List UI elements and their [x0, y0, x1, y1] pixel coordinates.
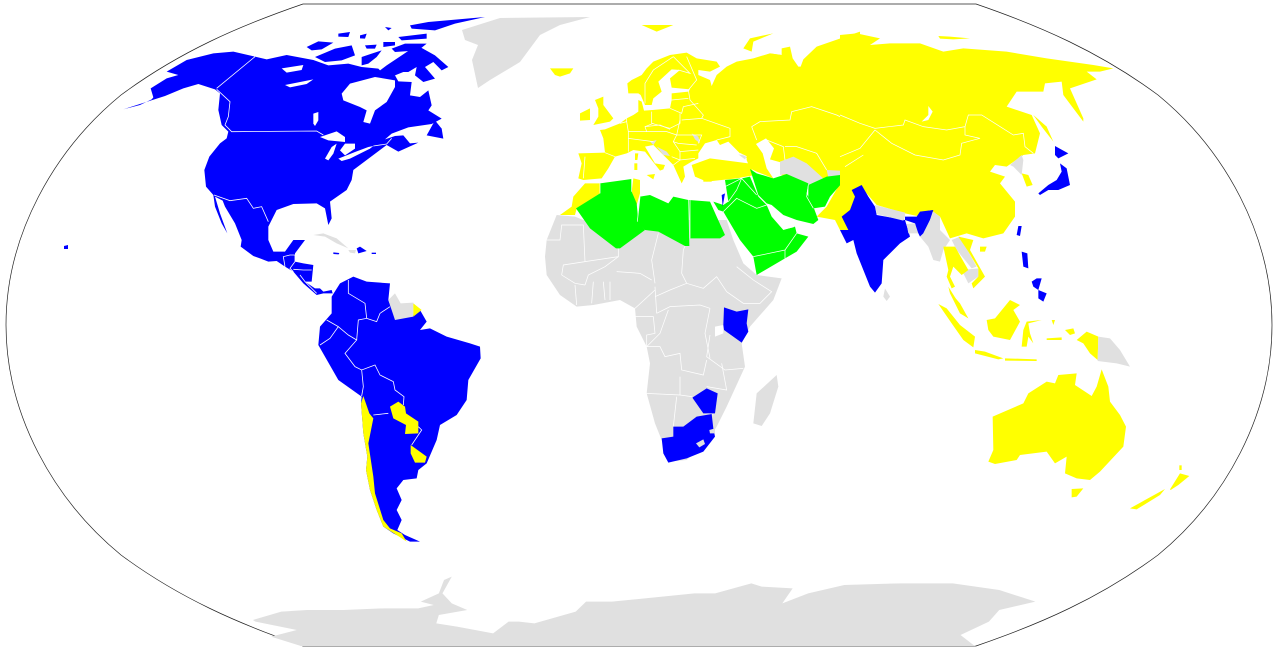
Tajikistan: [827, 170, 842, 179]
landmass: Africa: [545, 215, 782, 462]
Malay Peninsula: [948, 287, 968, 318]
Indonesia and Malaysia: [938, 290, 1075, 361]
Georgia region: [738, 154, 747, 159]
region: Southeast Asia and Oceania: [938, 290, 1189, 509]
Lesotho: [696, 439, 705, 447]
Paraguay: [390, 402, 418, 434]
Svalbard: [642, 25, 673, 32]
landmass: South America: [318, 277, 481, 542]
continent: Antarctica: [253, 577, 1035, 646]
Russia and China: [840, 33, 1113, 238]
French Guiana: [413, 303, 422, 317]
Taiwan: [1017, 226, 1022, 236]
Bosnia: [657, 147, 670, 156]
Sakhalin: [1033, 115, 1053, 142]
Iran: [750, 169, 818, 224]
India: [840, 185, 910, 293]
Turkey: [692, 158, 755, 182]
Laos: [952, 237, 977, 268]
Thailand: [943, 247, 968, 288]
South Africa: [662, 414, 715, 463]
region: North Africa, Middle East and Central Asia: [550, 25, 860, 275]
Russia, Kazakhstan and Pakistan: [747, 32, 860, 230]
Japan: [1038, 146, 1070, 200]
Myanmar: [920, 212, 950, 262]
New Zealand: [1130, 465, 1189, 509]
region: Africa: [545, 215, 782, 463]
Madagascar: [753, 375, 778, 426]
North Korea: [1010, 155, 1023, 175]
Persian Gulf: [767, 205, 797, 229]
Afghanistan: [808, 175, 842, 208]
landmass: Canada, USA, Mexico, Central America: [123, 52, 442, 295]
Iceland: [550, 68, 573, 77]
borders: [547, 225, 772, 427]
Morocco and Western Sahara: [560, 183, 600, 215]
Eswatini: [709, 428, 715, 433]
New Guinea west: [1077, 332, 1098, 360]
Caspian Sea: [756, 138, 782, 178]
Bangladesh: [907, 223, 918, 233]
Arabian Peninsula, Iraq, Syria and Jordan: [713, 177, 808, 275]
Nepal and Bhutan: [875, 205, 905, 221]
Chile: [361, 396, 407, 542]
Hainan: [980, 247, 987, 252]
Great Britain: [593, 97, 613, 125]
Uruguay: [411, 445, 427, 463]
Lake Baikal: [922, 106, 933, 122]
borders: [840, 115, 1033, 167]
Papua New Guinea: [1098, 337, 1130, 367]
Philippines: [1022, 252, 1047, 302]
borders: [600, 107, 860, 258]
Russian Arctic islands: [938, 36, 970, 39]
Libya: [637, 195, 689, 246]
Guianas: [388, 293, 413, 320]
Turkmenistan: [780, 157, 823, 185]
Sri Lanka: [883, 288, 890, 301]
Cambodia: [962, 268, 978, 283]
Tunisia: [632, 178, 640, 205]
Israel: [722, 193, 725, 207]
Slovenia: [650, 140, 657, 145]
borders: [583, 57, 755, 178]
lakes and bays: [282, 65, 395, 161]
Egypt: [689, 200, 725, 238]
borders: [320, 280, 422, 445]
Moldova: [692, 133, 700, 143]
Lake Victoria: [715, 325, 723, 337]
Ireland: [580, 108, 590, 121]
territory: Hawaii: [64, 245, 68, 249]
Newfoundland: [427, 120, 443, 139]
European mainland and Scandinavia: [578, 53, 790, 183]
Caribbean islands: [313, 233, 376, 254]
Australia: [988, 369, 1126, 480]
region: South America: [318, 277, 481, 542]
borders: [214, 57, 392, 293]
Northeast India: [905, 210, 933, 237]
Zimbabwe: [692, 388, 718, 413]
arctic islands: [307, 17, 485, 82]
Mediterranean islands: [634, 153, 712, 182]
South Korea: [1022, 173, 1033, 187]
Kenya: [723, 307, 748, 343]
Tasmania: [1072, 488, 1083, 497]
Novaya Zemlya: [743, 33, 773, 52]
region: Europe: [578, 53, 790, 183]
territory: Greenland: [462, 17, 590, 88]
region: North and Central America: [123, 17, 485, 295]
Algeria: [576, 179, 645, 248]
Vietnam: [958, 237, 985, 288]
region: Asia: [840, 33, 1113, 318]
